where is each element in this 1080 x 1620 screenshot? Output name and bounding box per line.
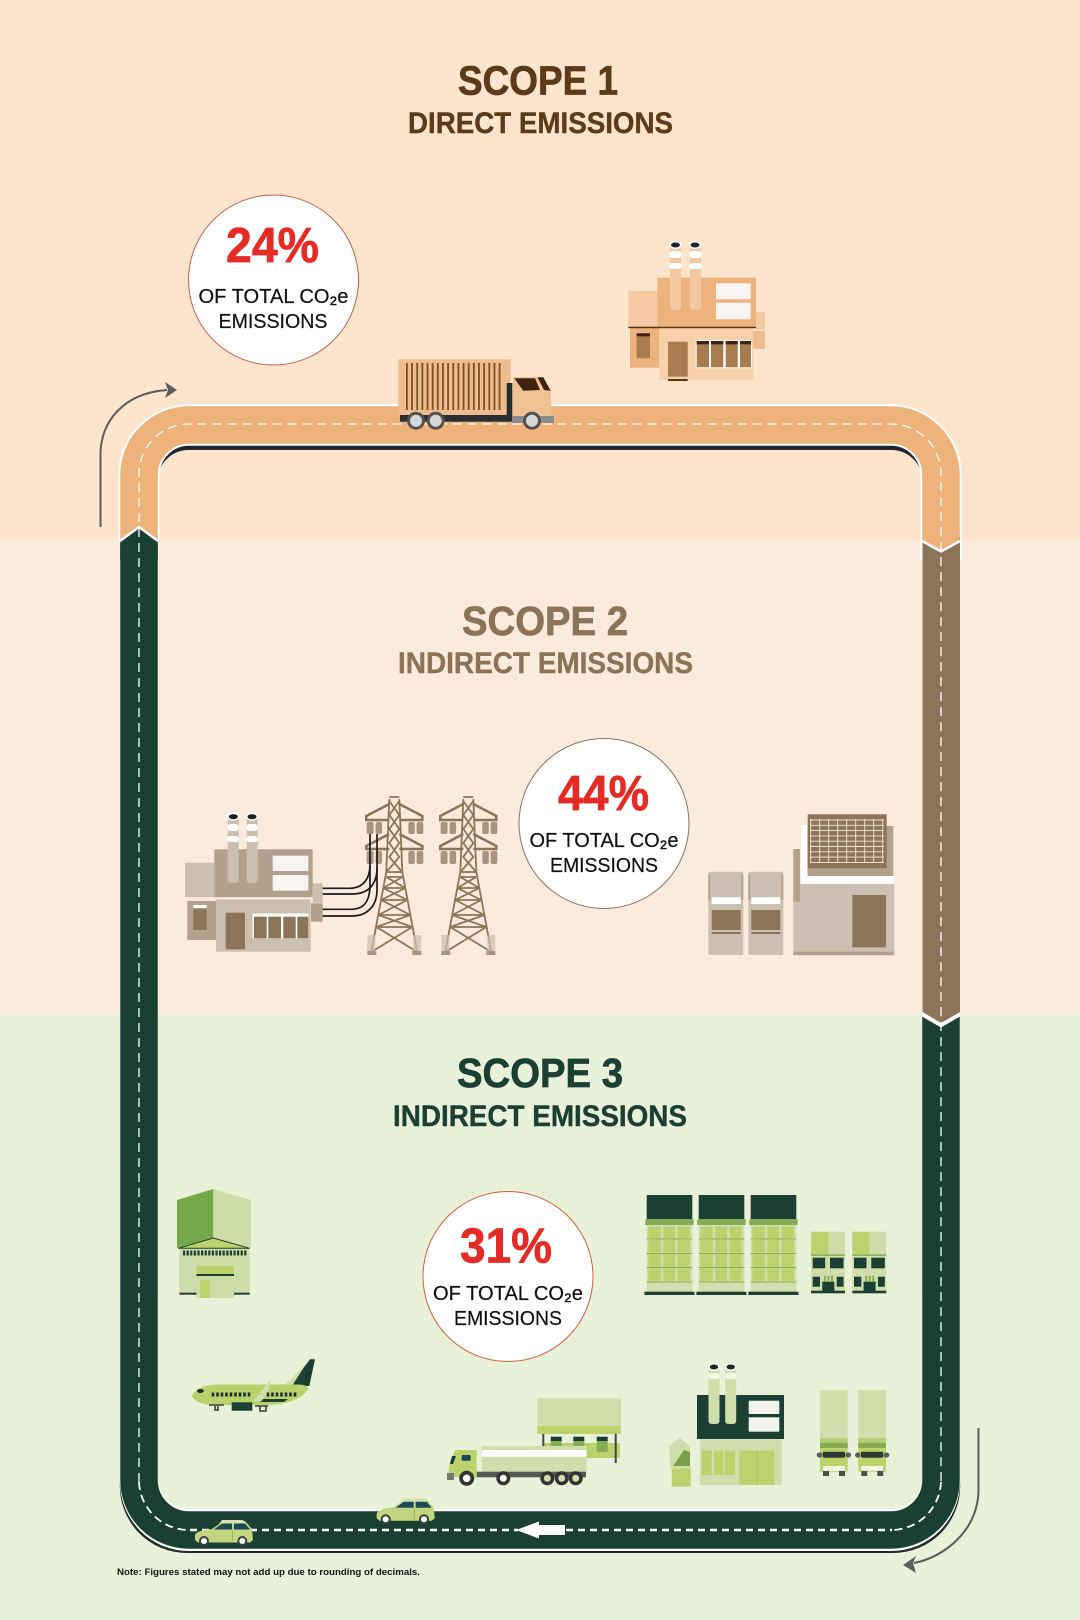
- icon: transmission tower 2: [440, 797, 497, 955]
- callout: 31 percent: 31%: [460, 1220, 552, 1274]
- callout: 31 percent: [423, 1192, 593, 1362]
- heading: scope 1: [408, 58, 673, 140]
- icon: green warehouse: [177, 1189, 251, 1298]
- icon: two small buildings: [811, 1232, 886, 1293]
- callout: 24 percent: 24%: [226, 219, 319, 273]
- heading: scope 3: [393, 1050, 687, 1133]
- heading: scope 3: SCOPE 3: [457, 1050, 623, 1096]
- road loop: [120, 424, 960, 1538]
- panel: scope 3 background: [0, 1014, 1080, 1620]
- heading: scope 1: DIRECT EMISSIONS: [408, 107, 673, 140]
- icon: row of three tall buildings: [644, 1195, 798, 1295]
- callout: 24 percent: EMISSIONS: [218, 311, 328, 333]
- heading: scope 2: SCOPE 2: [462, 598, 628, 644]
- icon: car on road lower: [195, 1520, 253, 1546]
- icon: delivery truck: [398, 359, 554, 430]
- icon: car on road upper: [377, 1498, 435, 1524]
- road segment: scope 2 brown: [922, 535, 960, 1026]
- heading: scope 2: [398, 598, 693, 680]
- callout: 44 percent: EMISSIONS: [550, 855, 658, 877]
- road segment: scope 3 dark left chevron: [120, 527, 158, 560]
- icon: transmission tower 1: [366, 797, 423, 955]
- road segment: scope 1 orange: [139, 425, 960, 1026]
- panel: scope 2 background: [0, 540, 1080, 1014]
- arrow on road: [516, 1522, 565, 1538]
- heading: scope 2: INDIRECT EMISSIONS: [398, 647, 693, 680]
- icon: green factory: [670, 1363, 784, 1487]
- power wires: [323, 834, 377, 916]
- callout: 44 percent: OF TOTAL CO₂e: [530, 830, 678, 852]
- arrow: right side going down: [903, 1428, 978, 1573]
- icon: tanker truck: [447, 1446, 587, 1486]
- callout: 24 percent: [188, 195, 358, 365]
- icon: two front-facing trucks: [817, 1390, 889, 1476]
- callout: 44 percent: 44%: [558, 767, 649, 821]
- road centre dashes: [139, 424, 941, 1530]
- icon: power plant brown: [185, 813, 323, 952]
- heading: scope 3: INDIRECT EMISSIONS: [393, 1100, 687, 1133]
- heading: scope 1: SCOPE 1: [458, 58, 618, 104]
- icon: brown building with solar panels: [708, 814, 894, 955]
- note: Note: Figures stated may not add up due to rounding of decimals.: [117, 1567, 420, 1578]
- icon: warehouse behind tanker: [537, 1398, 621, 1463]
- callout: 24 percent: OF TOTAL CO₂e: [198, 286, 348, 308]
- panel: scope 1 background: [0, 0, 1080, 540]
- callout: 31 percent: OF TOTAL CO₂e: [433, 1283, 583, 1305]
- icon: factory orange: [628, 241, 765, 381]
- callout: 31 percent: EMISSIONS: [454, 1308, 562, 1330]
- icon: airplane: [192, 1359, 315, 1411]
- callout: 44 percent: [519, 738, 689, 908]
- arrow: left side going up: [100, 382, 177, 527]
